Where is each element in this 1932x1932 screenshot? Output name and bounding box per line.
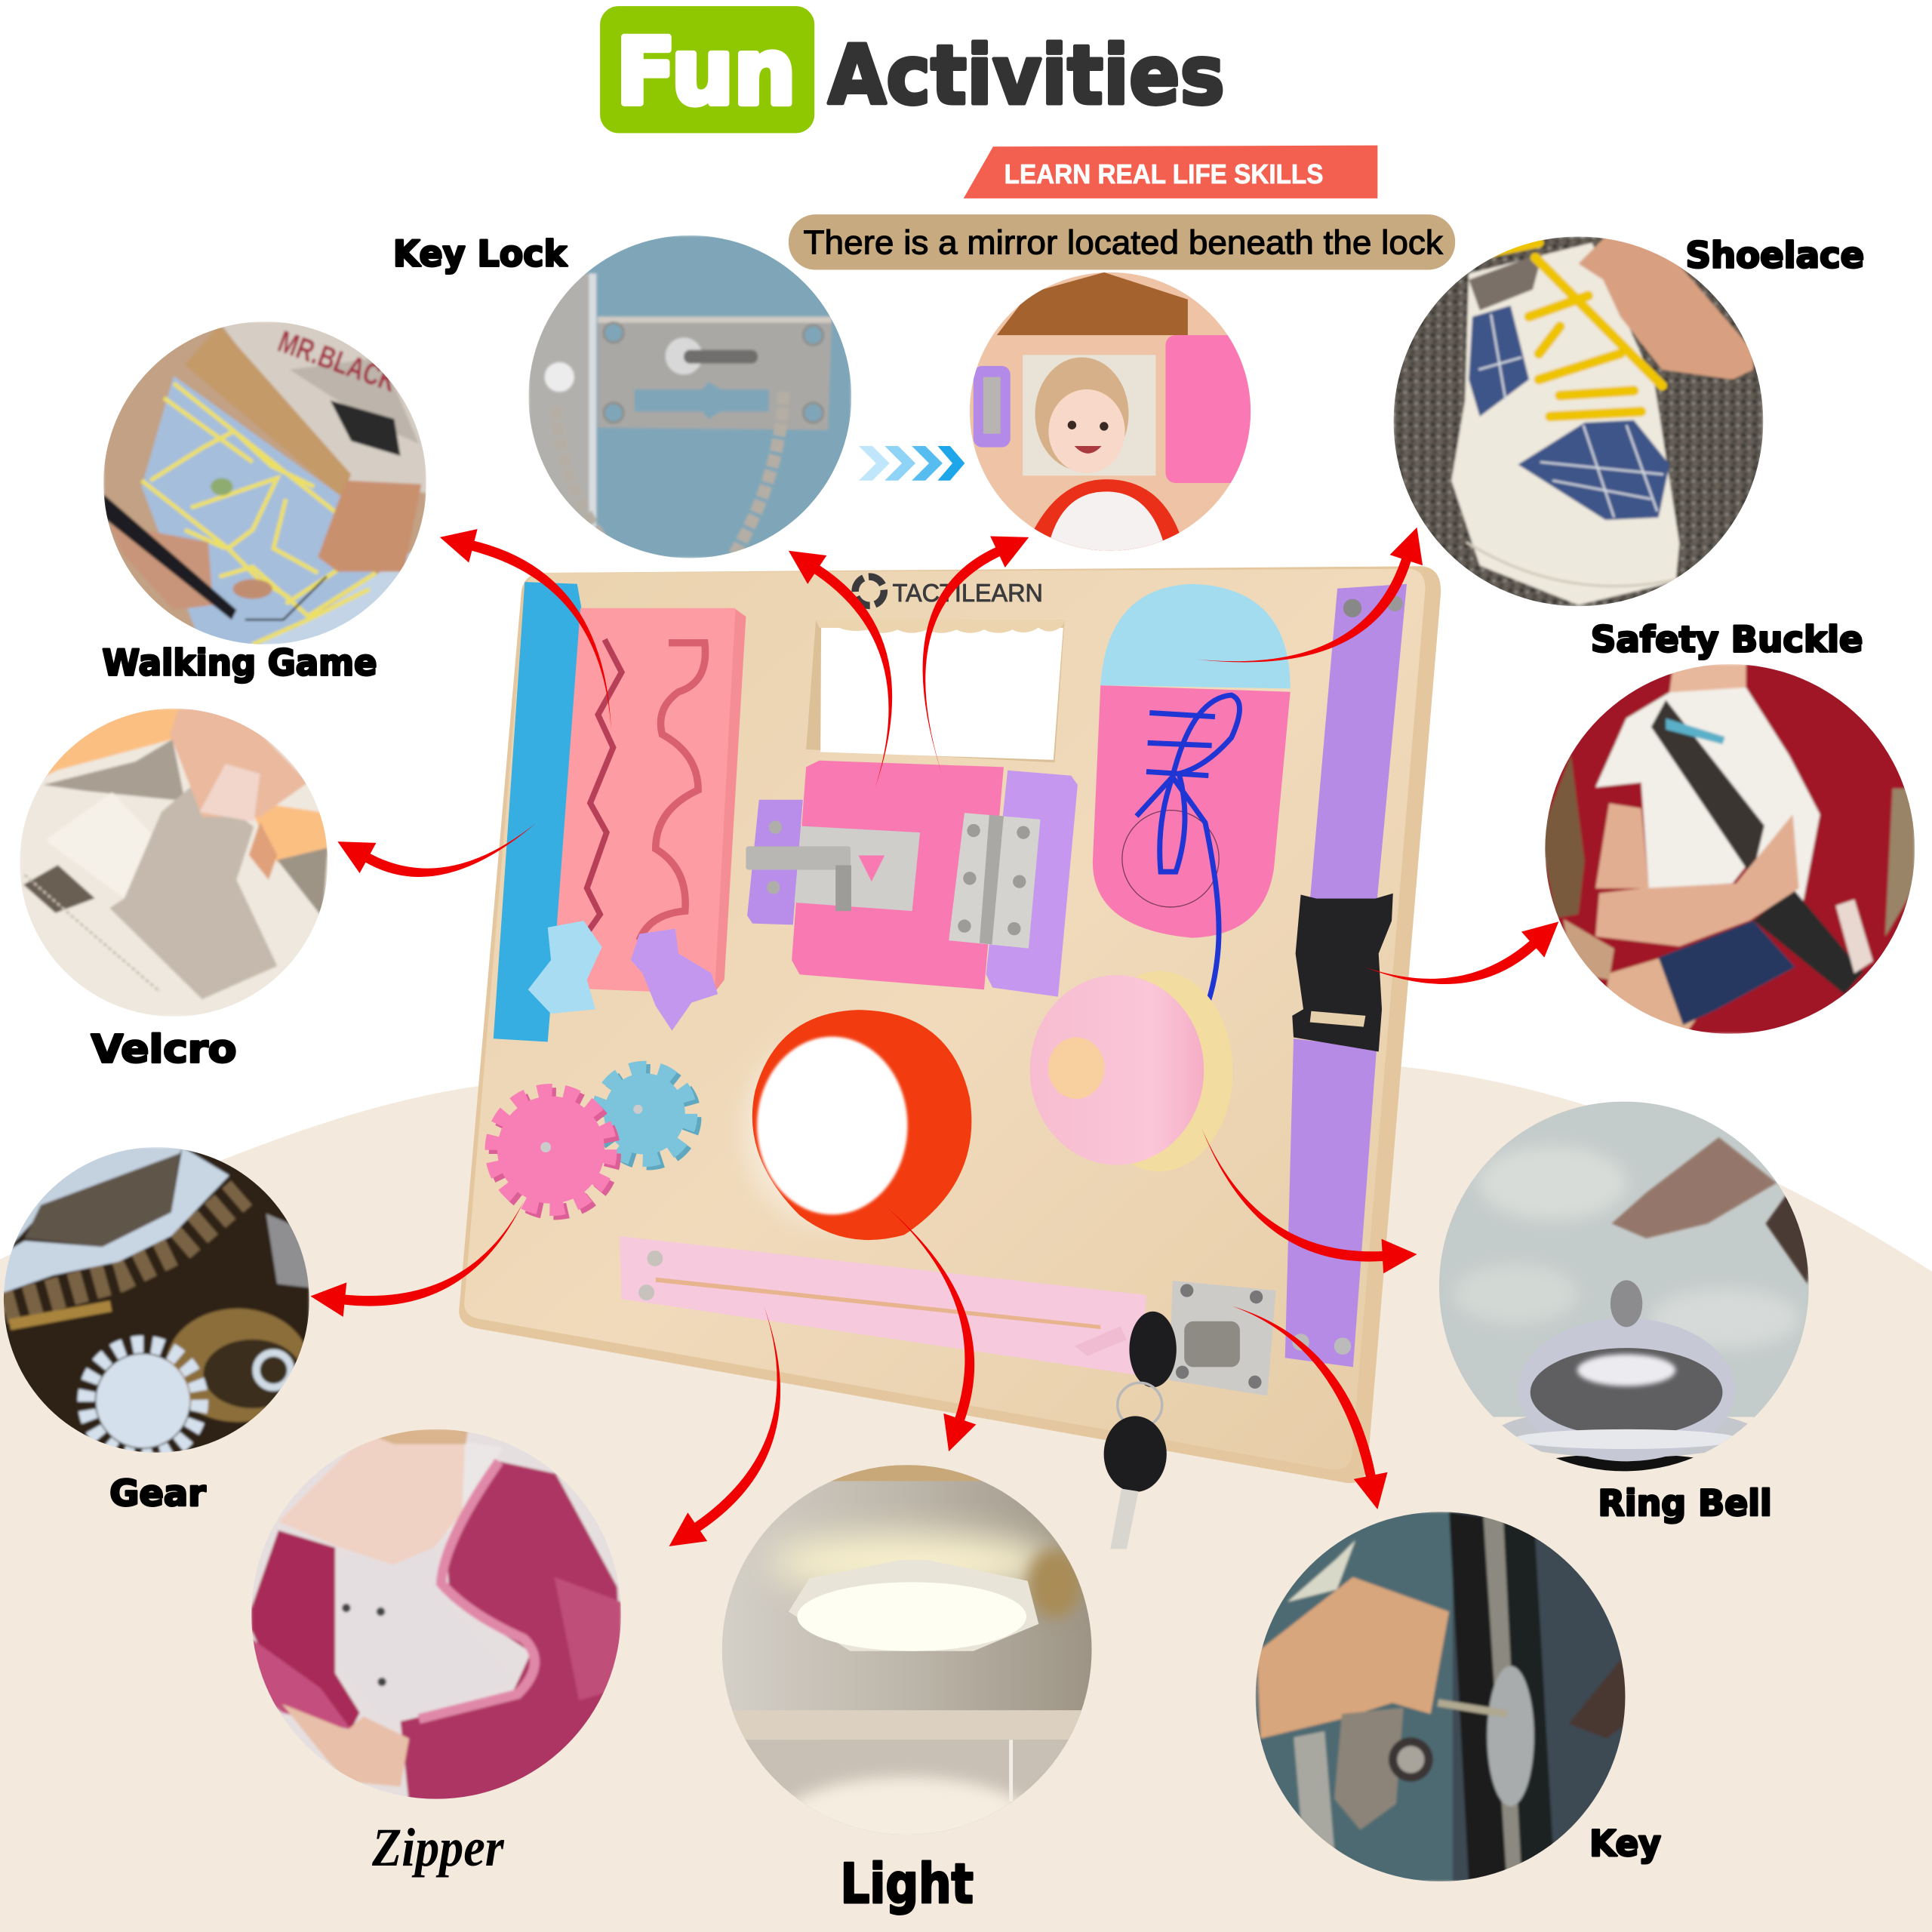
arrow to key lock: [789, 551, 892, 789]
photo: ring bell: [1429, 1102, 1823, 1478]
label: Key: Key: [1589, 1823, 1661, 1865]
photo: key in door: [1256, 1512, 1632, 1881]
wooden busy board: [459, 566, 1441, 1549]
photo: safety buckle child: [1540, 664, 1915, 1038]
pill: mirror caption: There is a mirror located beneath the lock: [803, 224, 1444, 261]
arrow to gear: [310, 1201, 524, 1317]
blue velcro strap: [494, 582, 583, 1042]
arrow to ring bell: [1201, 1128, 1417, 1273]
word Fun: Fun: [616, 20, 796, 125]
pink lock panel: [792, 761, 1004, 989]
mirror picture of baby: [1023, 355, 1155, 475]
background: beige curved table: [0, 1066, 1932, 1932]
banner: learn real life skills: [964, 146, 1377, 198]
purple bird piece: [631, 929, 718, 1031]
arrow to light: [888, 1208, 976, 1451]
photo: walking game: [103, 321, 426, 653]
banner: learn real life skills: LEARN REAL LIFE SKILLS: [1004, 158, 1323, 189]
silver slide latch: [746, 821, 920, 911]
red push light: [740, 1010, 971, 1240]
photo: velcro strap: [20, 709, 328, 1017]
pill: mirror caption: [789, 214, 1455, 270]
label: Ring Bell: Ring Bell: [1598, 1483, 1772, 1524]
purple elastic strap with buckle: [1285, 584, 1407, 1367]
title: Fun Activities: [600, 6, 1225, 133]
arrow to walking game: [440, 529, 611, 731]
label: Velcro: Velcro: [91, 1026, 236, 1071]
label: Walking Game: Walking Game: [103, 643, 377, 685]
photo: shoelace sneaker: [1394, 236, 1763, 606]
label: Gear: Gear: [109, 1473, 206, 1515]
label: Shoelace: Shoelace: [1685, 235, 1864, 276]
label: Safety Buckle: Safety Buckle: [1591, 620, 1863, 661]
purple latch mount: [747, 800, 803, 924]
pink bell: [1030, 971, 1232, 1171]
arrow to key: [1232, 1306, 1388, 1509]
silver cabinet lock and keys: [1104, 1281, 1276, 1549]
arrows: red callout arrows: [310, 528, 1558, 1546]
arrow to shoelace: [1195, 528, 1423, 662]
salmon maze panel: [552, 608, 746, 994]
silver hinge: [949, 813, 1041, 949]
photo: walking game: MR.BLACK: [274, 324, 401, 398]
arrow to mirror: [923, 537, 1029, 777]
label: Light: Light: [840, 1852, 974, 1915]
label: Zipper: Zipper: [371, 1817, 505, 1878]
arrow to zipper: [669, 1306, 780, 1546]
arrow to safety buckle: [1365, 921, 1558, 984]
word Activities: Activities: [828, 29, 1225, 123]
shoe panel: [1093, 584, 1291, 1026]
photo: gears: [4, 1147, 309, 1457]
pink zipper: [620, 1236, 1146, 1376]
photo: ceiling light: [722, 1465, 1092, 1870]
mirror window: [806, 620, 1065, 762]
brand logo: TACTILEARN: [893, 579, 1043, 607]
blue dog piece: [528, 921, 602, 1014]
purple hinge mount: [986, 771, 1078, 997]
photo: zipper child: [251, 1423, 621, 1805]
gears: [493, 1069, 693, 1212]
photo: mirror on board: [970, 272, 1258, 551]
photo: key lock latch: [528, 235, 851, 558]
icon: blue chevrons: [859, 446, 964, 481]
label: Key Lock: Key Lock: [393, 234, 568, 275]
arrow to velcro: [337, 823, 536, 877]
green Fun badge: [600, 6, 814, 133]
